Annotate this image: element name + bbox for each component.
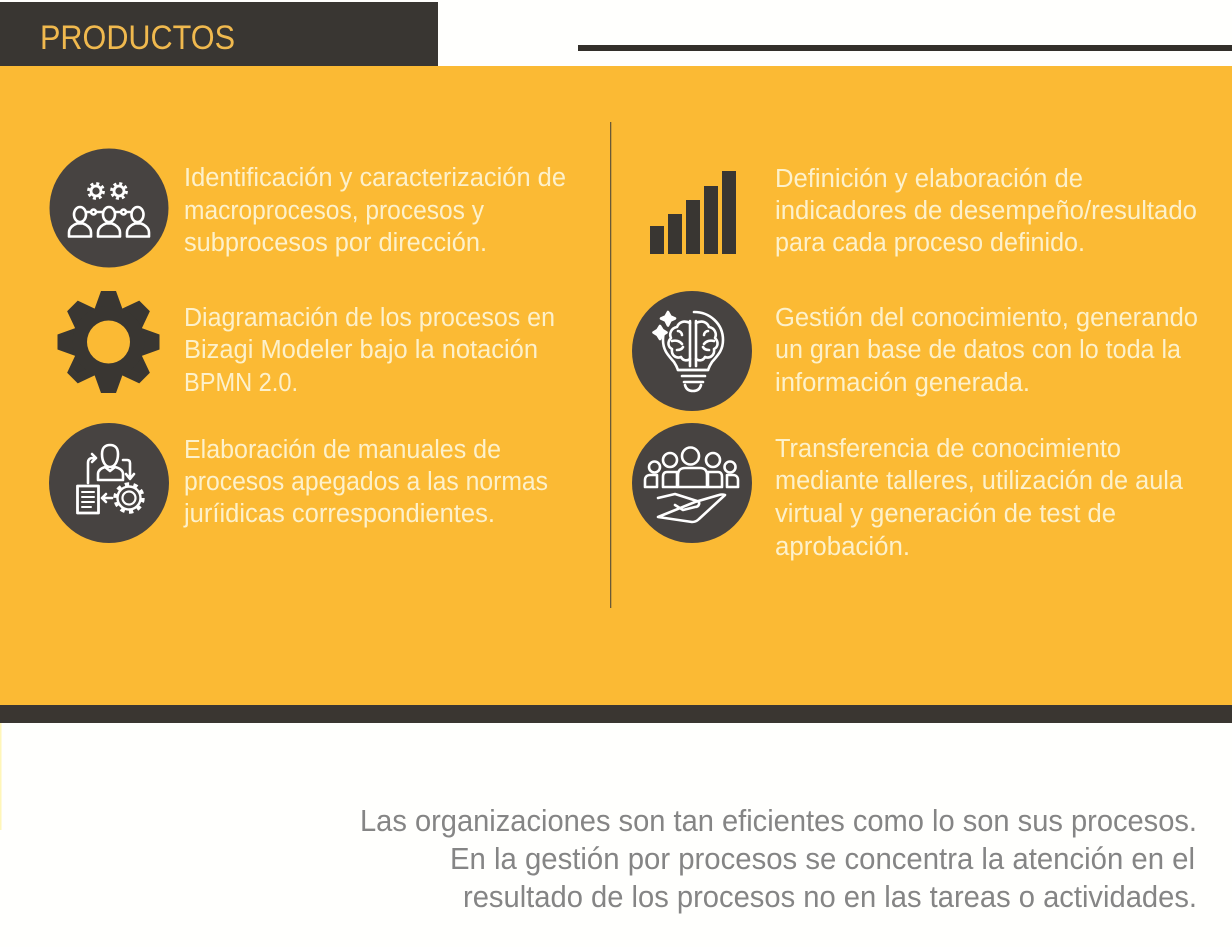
text: identificacion: Identificación y caracterización de [184, 164, 566, 192]
column divider [610, 122, 611, 608]
text: manuales [183, 436, 548, 528]
text: manuales: Elaboración de manuales de [184, 436, 501, 464]
header rule [578, 45, 1232, 51]
icon: brain light bulb [632, 291, 752, 411]
text: diagramacion: Bizagi Modeler bajo la notación [184, 336, 538, 364]
footer dark band [0, 705, 1232, 723]
text: diagramacion: Diagramación de los procesos en [184, 304, 555, 332]
icon: group in hand [632, 423, 752, 543]
closing statement: resultado de los procesos no en las tareas o actividades. [463, 880, 1197, 914]
text: identificacion [184, 164, 566, 257]
text: indicadores: Definición y elaboración de [775, 165, 1083, 193]
text: transferencia: Transferencia de conocimiento [775, 435, 1121, 463]
text: identificacion: macroprocesos, procesos y [184, 197, 484, 225]
text: manuales: juríidicas correspondientes. [183, 500, 495, 528]
text: transferencia [775, 435, 1184, 561]
closing statement: Las organizaciones son tan eficientes como lo son sus procesos. [360, 804, 1197, 838]
text: diagramacion [184, 304, 555, 397]
closing statement: En la gestión por procesos se concentra la atención en el [450, 842, 1195, 876]
text: transferencia: virtual y generación de test de [775, 500, 1116, 528]
text: gestion: un gran base de datos con lo toda la [775, 336, 1182, 364]
header bar [0, 2, 438, 66]
text: indicadores [775, 165, 1197, 257]
text: identificacion: subprocesos por dirección. [184, 229, 487, 257]
text: gestion [775, 304, 1198, 397]
text: gestion: información generada. [775, 369, 1030, 397]
yellow main panel [0, 66, 1232, 705]
icon: manual workflow [49, 423, 169, 543]
icon: bar chart [650, 171, 736, 254]
closing statement [360, 804, 1197, 914]
text: indicadores: para cada proceso definido. [775, 229, 1085, 257]
left edge stripe [0, 723, 2, 830]
text: manuales: procesos apegados a las normas [184, 468, 548, 496]
text: gestion: Gestión del conocimiento, generando [775, 304, 1198, 332]
heading: productos: PRODUCTOS [40, 19, 235, 57]
icon: gear [58, 291, 160, 393]
text: diagramacion: BPMN 2.0. [184, 369, 298, 397]
icon: sparkles [654, 312, 675, 339]
text: transferencia: aprobación. [775, 533, 910, 561]
text: indicadores: indicadores de desempeño/resultado [775, 197, 1197, 225]
text: transferencia: mediante talleres, utilización de aula [775, 467, 1184, 495]
icon: people and gears [50, 148, 168, 268]
